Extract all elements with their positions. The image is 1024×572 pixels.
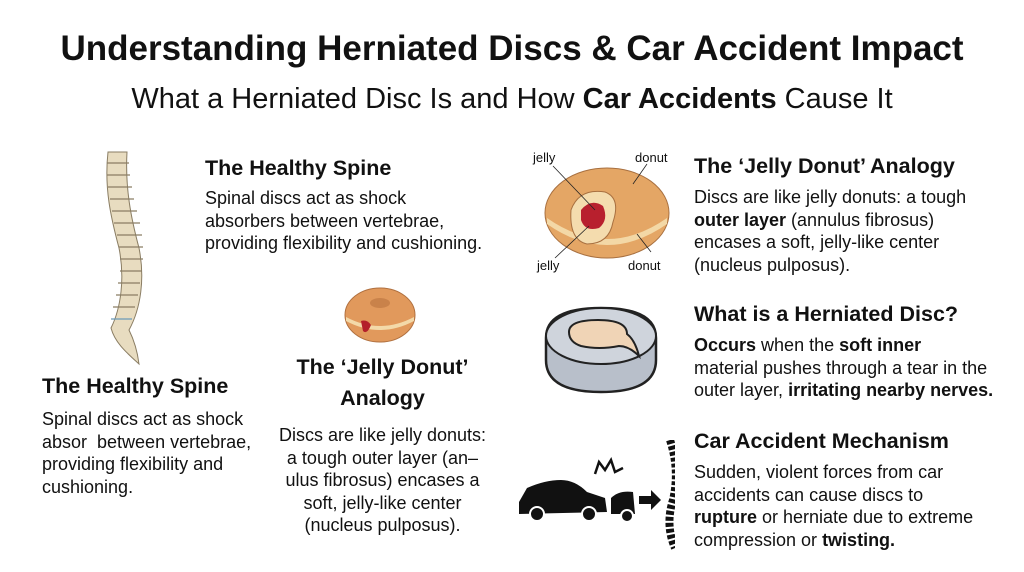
icon: car crash with spine	[519, 440, 675, 550]
icon: jelly donut with labels: donut	[635, 150, 668, 165]
heading: The ‘Jelly Donut’ Analogy	[694, 154, 955, 178]
text: compression or twisting.	[694, 530, 895, 550]
text: soft, jelly-like center	[303, 492, 462, 512]
text: Occurs when the soft inner	[694, 335, 921, 355]
heading: Analogy	[340, 386, 425, 410]
text: providing flexibility and cushioning.	[205, 233, 482, 253]
text: rupture or herniate due to extreme	[694, 507, 973, 527]
title: Understanding Herniated Discs & Car Accident Impact	[60, 29, 964, 68]
text	[279, 425, 486, 535]
text: outer layer (annulus fibrosus)	[694, 210, 934, 230]
icon: jelly donut with labels: jelly	[532, 150, 556, 165]
icon: herniated disc	[544, 306, 658, 394]
panel: car accident mechanism	[694, 429, 973, 550]
text: cushioning.	[42, 476, 133, 496]
text: absor between vertebrae,	[42, 432, 251, 452]
icon: spine	[106, 152, 143, 366]
icon: jelly donut with labels: donut	[628, 258, 661, 273]
text: accidents can cause discs to	[694, 484, 923, 504]
heading: The Healthy Spine	[42, 374, 228, 398]
text: (nucleus pulposus).	[694, 254, 850, 274]
heading: The Healthy Spine	[205, 156, 391, 180]
text: Discs are like jelly donuts:	[279, 425, 486, 445]
panel: healthy spine top	[205, 156, 482, 253]
panel: jelly donut right	[694, 154, 966, 275]
text: ulus fibrosus) encases a	[285, 470, 480, 490]
text: Discs are like jelly donuts: a tough	[694, 187, 966, 207]
subtitle: What a Herniated Disc Is and How Car Accidents Cause It	[131, 83, 893, 115]
text: material pushes through a tear in the	[694, 358, 987, 378]
icon: small donut	[344, 288, 416, 342]
panel: jelly donut left	[279, 355, 486, 535]
text: encases a soft, jelly-like center	[694, 232, 939, 252]
text	[694, 335, 993, 400]
text: providing flexibility and	[42, 454, 223, 474]
text	[694, 187, 966, 275]
text: absorbers between vertebrae,	[205, 210, 444, 230]
text	[42, 409, 251, 497]
text	[694, 462, 973, 550]
panel: herniated disc	[694, 302, 993, 400]
icon: jelly donut with labels: jelly	[536, 258, 560, 273]
heading	[296, 355, 469, 410]
text: Spinal discs act as shock	[42, 409, 243, 429]
text: (nucleus pulposus).	[304, 515, 461, 535]
panel: healthy spine left	[42, 374, 251, 497]
text	[205, 188, 482, 253]
heading: Car Accident Mechanism	[694, 429, 949, 453]
text: a tough outer layer (an–	[287, 448, 478, 468]
text: Sudden, violent forces from car	[694, 462, 943, 482]
heading: The ‘Jelly Donut’	[296, 355, 469, 379]
heading: What is a Herniated Disc?	[694, 302, 958, 326]
icon: jelly donut with labels	[532, 150, 670, 273]
text: Spinal discs act as shock	[205, 188, 406, 208]
text: outer layer, irritating nearby nerves.	[694, 380, 993, 400]
